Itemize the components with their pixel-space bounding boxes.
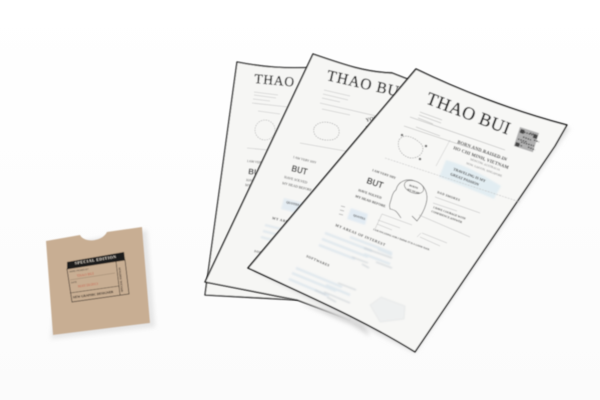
quote side marks xyxy=(339,206,345,215)
interest heading: MY AREAS OF INTEREST xyxy=(335,223,386,247)
vertical divider xyxy=(436,140,450,166)
travel callout xyxy=(439,160,501,199)
middle quote chip xyxy=(281,198,304,214)
sheet: front copy: HO CHI MINH, VIETNAM xyxy=(452,146,510,171)
icon: head profile: MY HEAD xyxy=(407,188,420,195)
sheet: front copy xyxy=(248,69,570,353)
banner text: SPECIAL EDITION xyxy=(74,254,117,265)
form labels: HAND PICKED BY xyxy=(69,268,89,273)
ticket box xyxy=(67,252,129,302)
ticket box: THAO BUI xyxy=(77,272,95,278)
middle interest heading: MY AREAS xyxy=(272,216,294,225)
back title: THAO xyxy=(254,71,296,90)
sheet: front copy: MY HEAD BEFORE xyxy=(355,194,387,209)
ticket box: MAY/26/2013 xyxy=(78,282,98,288)
sheet: back copy: HAVE SOLVED xyxy=(246,178,270,185)
ticket box: NEW GRAPHIC DESIGNER xyxy=(73,290,114,299)
middle details xyxy=(300,90,385,154)
sheet: back copy: MY HEAD xyxy=(245,183,262,189)
birthplace heading: BORN AND RAISED IN xyxy=(456,140,508,163)
sheet: middle copy: YOUR xyxy=(365,115,383,124)
envelope: special edition xyxy=(46,227,155,339)
sheet: middle copy: MY HEAD BEFORE xyxy=(282,181,312,192)
software heading: SOFTWARES xyxy=(306,254,330,268)
ticket box: DATE xyxy=(71,281,77,284)
sheet: front copy: I AM FOCUSING FOR I THINK IT IS A GOOD TOOL xyxy=(373,228,431,252)
horizontal rule xyxy=(385,158,520,202)
icon: head profile xyxy=(390,178,427,221)
sheet: back copy xyxy=(205,62,320,300)
sheet: middle copy: I AM VERY SHY xyxy=(293,155,318,165)
sheet: middle copy: SOFTWARES xyxy=(254,249,278,259)
quote chip xyxy=(347,208,368,225)
ticket box: SPECIAL EDITION xyxy=(118,267,124,292)
sheet: front copy: I HAVE COURAGE WITH xyxy=(433,205,467,221)
quote box text xyxy=(375,214,447,246)
software blue lines xyxy=(289,268,350,296)
icon: laptop shape xyxy=(370,297,405,322)
sheet: front copy: NOW, SAIGON, SINGAPORE xyxy=(465,161,503,179)
travel callout: TRAVELING IS MY xyxy=(453,167,486,183)
sheet: middle copy: QUOTES xyxy=(286,200,300,207)
shy text: I AM VERY SHY xyxy=(372,168,397,180)
right column text: DAD SMOKES xyxy=(437,190,461,202)
black banner xyxy=(67,252,125,269)
sheet: back copy: BU xyxy=(248,167,260,177)
solved head text: HAVE SOLVED xyxy=(358,188,383,200)
interest blue lines xyxy=(319,233,392,264)
back details xyxy=(247,92,290,152)
contact details xyxy=(404,112,506,160)
front title: THAO BUI xyxy=(424,88,514,139)
sheet: middle copy: YOUR xyxy=(365,123,383,132)
sheet: middle copy: BUT xyxy=(291,163,309,177)
middle blue lines xyxy=(261,225,293,244)
travel callout: GREAT PASSION xyxy=(450,172,480,187)
middle title: THAO BUI xyxy=(325,67,407,102)
sheet: middle copy: HAVE SOLVED xyxy=(284,175,308,185)
sheet: back copy: I AM VERY SHY xyxy=(247,159,272,166)
brain label: BURNS xyxy=(409,184,419,190)
birthplace details: MOSCOW, AUSTRALIA xyxy=(469,157,501,173)
sheet: middle copy xyxy=(205,54,410,320)
quote chip: QUOTES xyxy=(353,213,366,221)
but: BUT xyxy=(365,175,385,191)
sheet: front copy: CONFIDENCE ANSWER xyxy=(431,209,464,224)
paper shadow xyxy=(300,303,370,336)
qr code xyxy=(514,127,539,152)
map diagram xyxy=(398,134,427,160)
